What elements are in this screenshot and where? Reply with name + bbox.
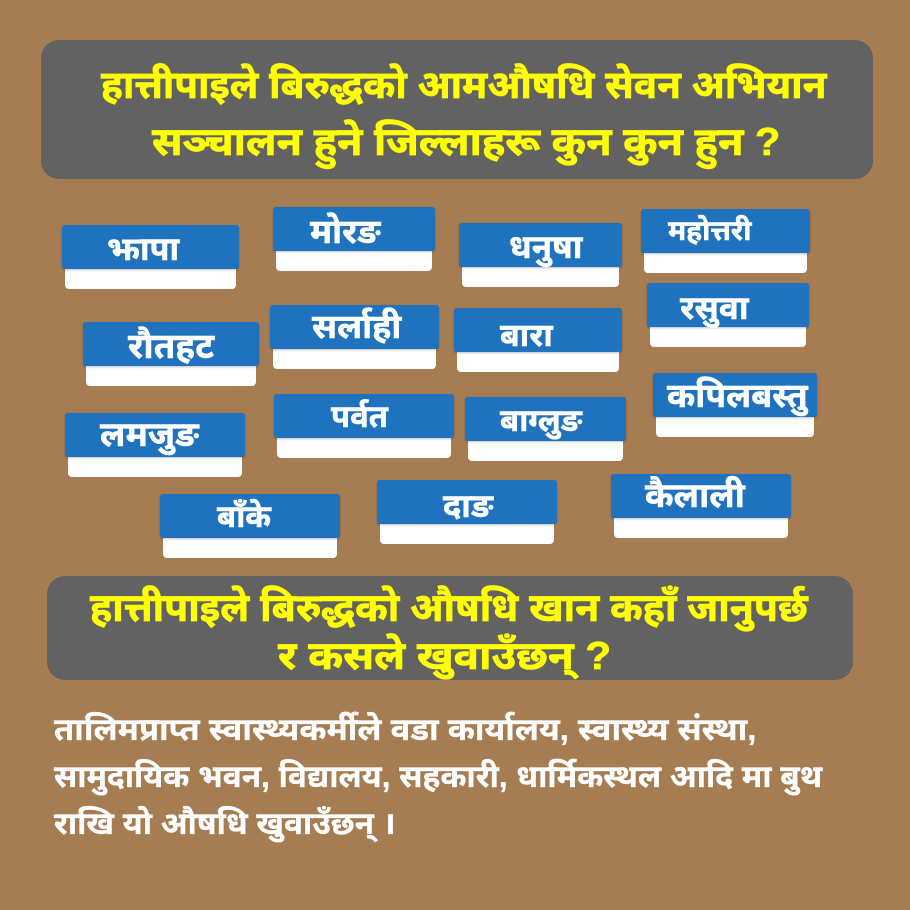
- answer line 2: सामुदायिक भवन, विद्यालय, सहकारी, धार्मिकस्थल आदि मा बुथ: [54, 758, 822, 794]
- district tag: Dang: दाङ: [443, 488, 493, 524]
- district tag: Bara: [453, 308, 623, 372]
- district tag: Kapilbastu: कपिलबस्तु: [667, 377, 808, 415]
- heading line 2: सञ्चालन हुने जिल्लाहरू कुन कुन हुन ?: [152, 121, 780, 164]
- district tag: Sarlahi: [269, 305, 440, 369]
- district tag: Rasuwa: रसुवा: [680, 289, 749, 326]
- district tag: Morang: [272, 207, 436, 271]
- district tag: Kailali: [610, 474, 792, 538]
- district tag: Parbat: [273, 394, 455, 458]
- panel: top heading: [41, 40, 873, 179]
- district tag: Kailali: कैलाली: [645, 477, 745, 515]
- district tag: Lamjung: लमजुङ: [100, 416, 199, 454]
- district tag: Bara: बारा: [500, 317, 553, 353]
- district tag: Kapilbastu: [652, 373, 818, 437]
- panel: second heading: [47, 576, 853, 680]
- heading line 1: हात्तीपाइले बिरुद्धको आमऔषधि सेवन अभियान: [101, 64, 826, 107]
- district tag: Banke: बाँके: [217, 499, 271, 534]
- district tag: Mahottari: [640, 209, 811, 273]
- district tag: Banke: [159, 494, 341, 558]
- district tag: Dhanusha: [458, 223, 623, 287]
- district tag: Morang: मोरङ: [310, 213, 380, 251]
- district tag: Rautahat: [82, 322, 260, 386]
- answer line 1: तालिमप्राप्त स्वास्थ्यकर्मीले वडा कार्यालय, स्वास्थ्य संस्था,: [54, 711, 756, 747]
- district tag: Mahottari: महोत्तरी: [668, 215, 752, 246]
- text block: answer: [54, 711, 823, 842]
- district tag: Rasuwa: [646, 283, 810, 347]
- answer line 3: राखि यो औषधि खुवाउँछन् ।: [54, 805, 395, 841]
- second heading line 2: र कसले खुवाउँछन् ?: [278, 635, 611, 678]
- district tag: Baglung: [464, 397, 627, 461]
- district tag: Jhapa: झापा: [107, 231, 179, 267]
- district tag: Baglung: बाग्लुङ: [500, 403, 582, 438]
- district tag: Jhapa: [61, 225, 240, 289]
- district tag: Lamjung: [64, 413, 246, 477]
- district tag: Sarlahi: सर्लाही: [312, 308, 401, 346]
- district tag: Dang: [376, 480, 558, 544]
- second heading line 1: हात्तीपाइले बिरुद्धको औषधि खान कहाँ जानुपर्छ: [90, 587, 808, 630]
- district tag: Dhanusha: धनुषा: [509, 228, 582, 265]
- district tag: Parbat: पर्वत: [331, 399, 388, 434]
- district tag: Rautahat: रौतहट: [128, 327, 214, 366]
